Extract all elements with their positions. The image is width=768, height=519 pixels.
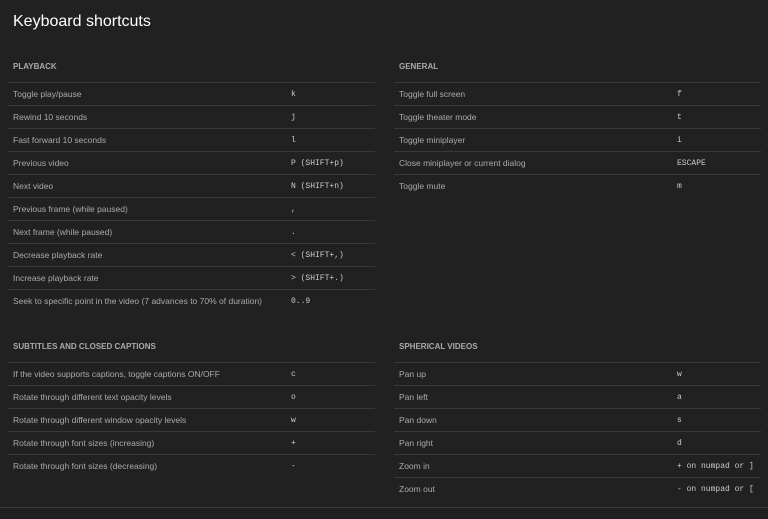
panel: general: Toggle miniplayer: [399, 135, 465, 145]
panel: playback: k: [291, 90, 296, 99]
panel: subtitles: w: [291, 416, 296, 425]
panel: playback: Rewind 10 seconds: [13, 112, 87, 122]
panel: spherical: a: [677, 393, 682, 402]
heading: general: GENERAL: [399, 62, 438, 71]
panel: playback: [8, 62, 375, 306]
panel: playback: j: [291, 113, 296, 122]
panel: general: m: [677, 182, 682, 191]
panel: playback: Increase playback rate: [13, 273, 99, 283]
panel: playback: 0..9: [291, 297, 310, 306]
heading: spherical: SPHERICAL VIDEOS: [399, 342, 478, 351]
panel: playback: Fast forward 10 seconds: [13, 135, 106, 145]
heading: subtitles: SUBTITLES AND CLOSED CAPTIONS: [13, 342, 156, 351]
panel: spherical: s: [677, 416, 682, 425]
panel: spherical: Pan down: [399, 415, 437, 425]
panel: subtitles: Rotate through font sizes (increasing): [13, 438, 154, 448]
panel: playback: P (SHIFT+p): [291, 159, 344, 168]
panel: general: Toggle mute: [399, 181, 445, 191]
panel: general: Toggle theater mode: [399, 112, 476, 122]
panel: subtitles: Rotate through different window opacity levels: [13, 415, 186, 425]
panel: subtitles: o: [291, 393, 296, 402]
panel: spherical: Zoom in: [399, 461, 430, 471]
panel: general: ESCAPE: [677, 159, 706, 168]
panel: spherical: Pan right: [399, 438, 433, 448]
panel: general: Close miniplayer or current dialog: [399, 158, 526, 168]
panel: playback: Previous frame (while paused): [13, 204, 128, 214]
panel: playback: Next frame (while paused): [13, 227, 112, 237]
panel: playback: l: [291, 136, 296, 145]
panel: spherical: + on numpad or ]: [677, 462, 754, 471]
panel: spherical: Pan left: [399, 392, 428, 402]
panel: playback: N (SHIFT+n): [291, 182, 344, 191]
panel: subtitles: If the video supports captions, toggle captions ON/OFF: [13, 369, 220, 379]
panel: spherical: - on numpad or [: [677, 485, 754, 494]
panel: subtitles: Rotate through font sizes (decreasing): [13, 461, 157, 471]
panel: playback: .: [291, 228, 296, 237]
panel: spherical: d: [677, 439, 682, 448]
panel: general: Toggle full screen: [399, 89, 465, 99]
panel: subtitles: +: [291, 439, 296, 448]
panel: playback: Seek to specific point in the video (7 advances to 70% of duration): [13, 296, 262, 306]
panel: subtitles: c: [291, 370, 296, 379]
panel: general: f: [677, 90, 682, 99]
panel: general: t: [677, 113, 682, 122]
panel: playback: ,: [291, 205, 296, 214]
panel: playback: Next video: [13, 181, 53, 191]
panel: subtitles: [8, 342, 375, 471]
panel: spherical: Zoom out: [399, 484, 435, 494]
panel: playback: > (SHIFT+.): [291, 274, 344, 283]
panel: subtitles: Rotate through different text opacity levels: [13, 392, 172, 402]
panel: spherical: w: [677, 370, 682, 379]
title: Keyboard shortcuts: [13, 13, 151, 30]
panel: playback: Toggle play/pause: [13, 89, 82, 99]
panel: spherical: Pan up: [399, 369, 426, 379]
panel: playback: Decrease playback rate: [13, 250, 102, 260]
panel: subtitles: -: [291, 462, 296, 471]
panel: general: [394, 62, 761, 191]
heading: playback: PLAYBACK: [13, 62, 57, 71]
panel: spherical: [394, 342, 761, 494]
panel: playback: Previous video: [13, 158, 69, 168]
panel: playback: < (SHIFT+,): [291, 251, 344, 260]
panel: general: i: [677, 136, 682, 145]
